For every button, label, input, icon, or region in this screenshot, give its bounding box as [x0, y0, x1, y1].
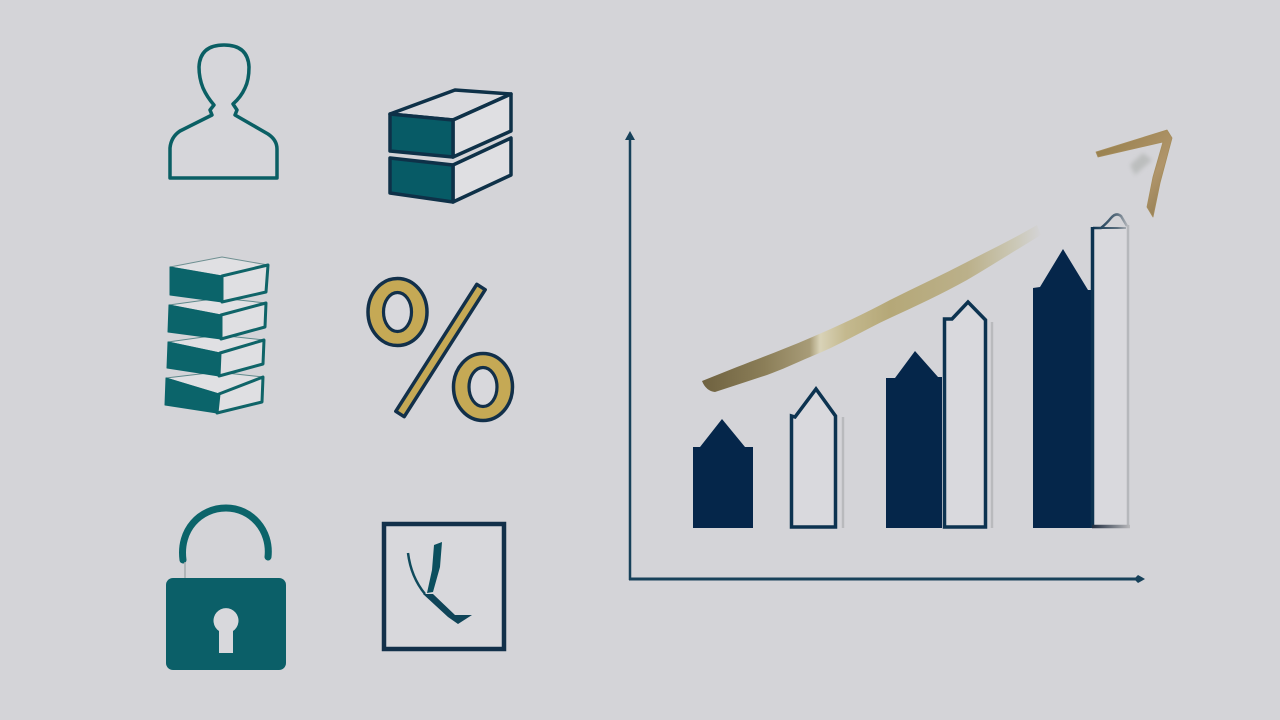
bar 5 solid	[1033, 249, 1091, 528]
bar 2 outline	[792, 389, 843, 528]
clock frame	[384, 524, 504, 649]
bar 3 solid	[886, 351, 942, 528]
clock thick hand	[427, 542, 442, 593]
arrow swoosh	[702, 225, 1041, 392]
x axis	[629, 575, 1145, 583]
percent bottom ring	[454, 354, 512, 420]
book 1	[170, 257, 268, 302]
padlock shackle	[183, 508, 268, 560]
bar 1 solid	[693, 419, 753, 528]
arrow faded shaft	[1130, 153, 1152, 175]
icon: percent sign	[368, 278, 512, 420]
growth arrow	[702, 130, 1172, 392]
arrow head	[1096, 130, 1172, 217]
padlock shackle stem	[184, 562, 186, 578]
icon: open padlock	[166, 508, 286, 670]
bar 4 outline	[944, 302, 992, 528]
book 3	[167, 335, 264, 376]
icon: two stacked blocks	[390, 90, 511, 202]
clock foot	[423, 594, 472, 624]
percent top ring	[368, 278, 427, 346]
lower block	[390, 138, 511, 202]
book 2	[168, 298, 266, 339]
bar 6 fading outline	[1092, 214, 1130, 528]
percent slash	[396, 284, 485, 417]
icon: person outline	[170, 45, 277, 178]
y axis	[625, 131, 635, 580]
book 4	[165, 372, 263, 413]
icon: square clock	[384, 524, 504, 649]
padlock body	[166, 578, 286, 670]
padlock keyhole	[214, 608, 238, 653]
icon: stack of four books	[165, 257, 268, 413]
chart: rising bars	[625, 131, 1145, 583]
clock thin hand	[408, 553, 425, 594]
upper block	[390, 90, 511, 157]
